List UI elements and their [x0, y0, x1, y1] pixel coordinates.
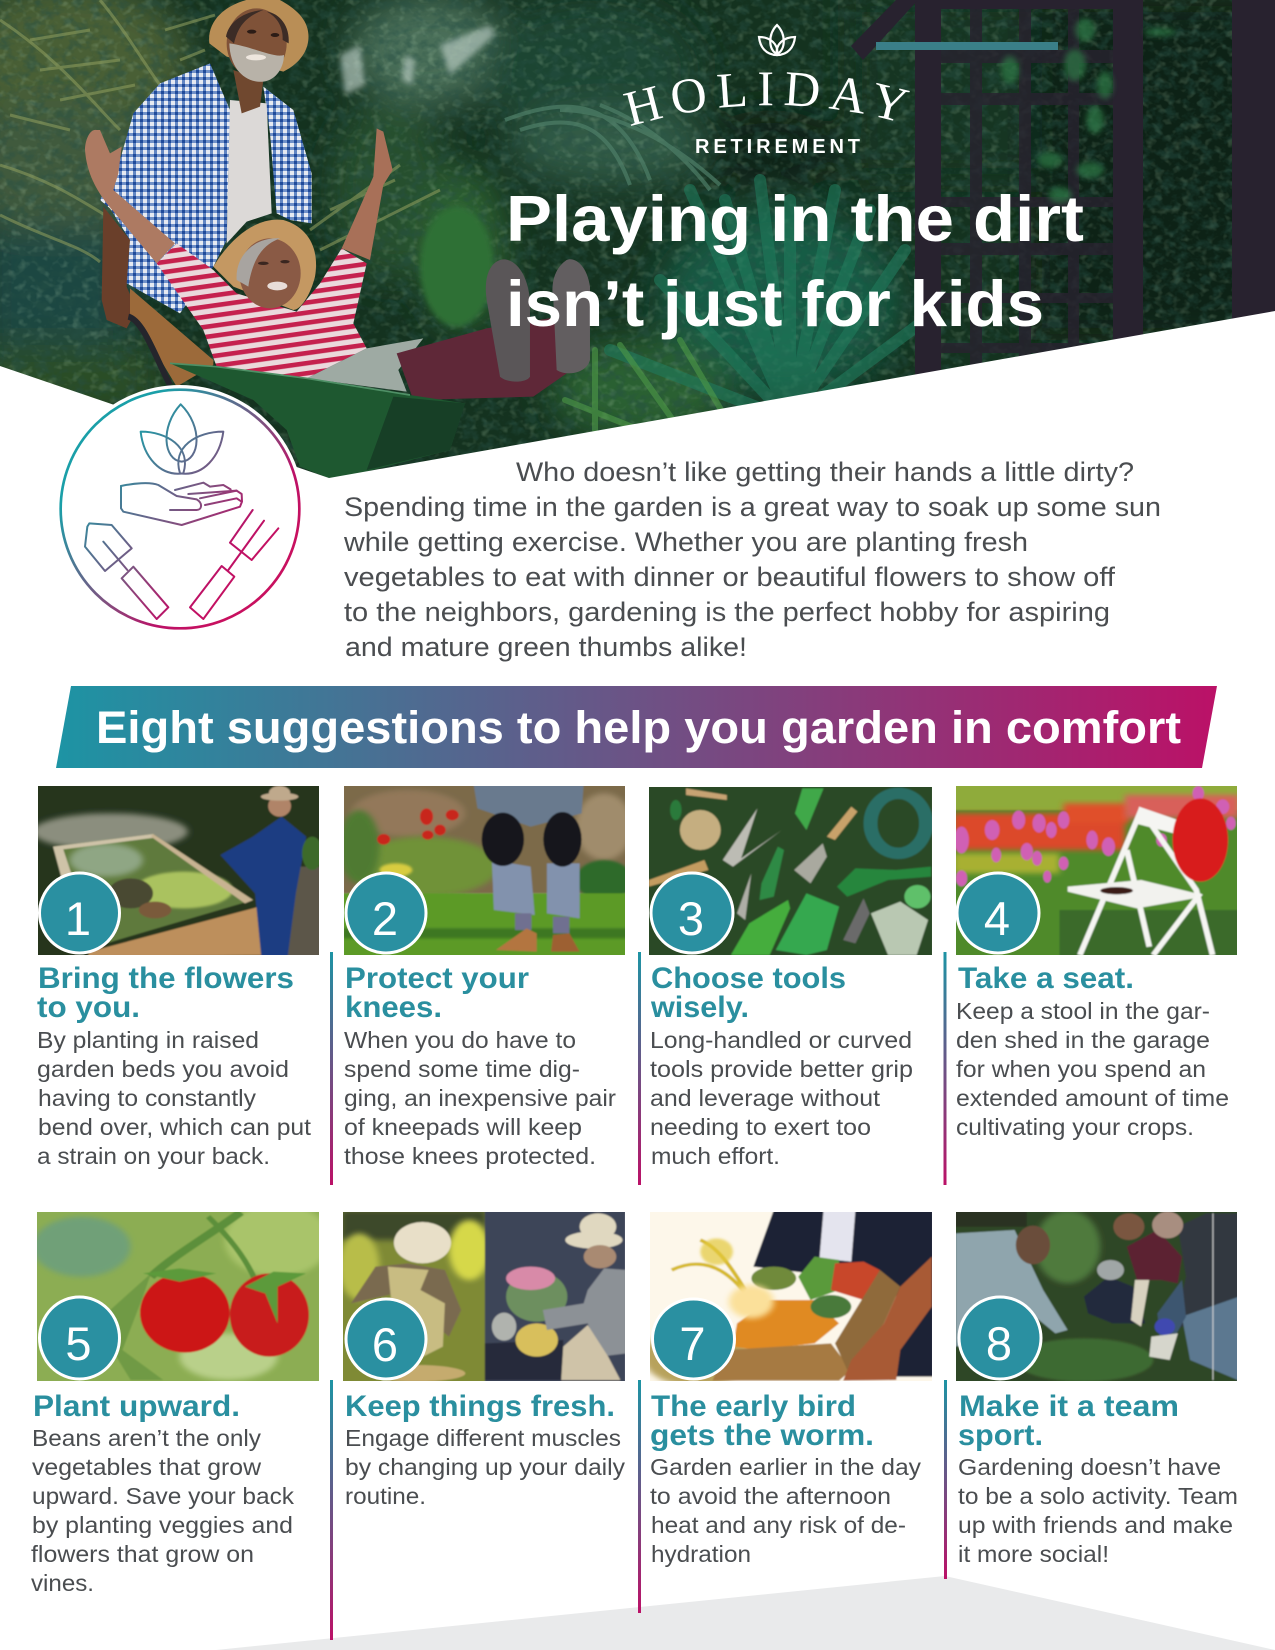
number badge: 5 — [65, 1317, 92, 1370]
card 1 — [33, 783, 322, 1169]
spiky leaves — [610, 180, 925, 420]
body: to be a solo activity. Team — [958, 1483, 1238, 1509]
section banner: Eight suggestions to help you garden in comfort — [96, 702, 1181, 753]
vertical dividers — [330, 952, 947, 1640]
body: Engage different muscles — [345, 1425, 621, 1451]
heading — [37, 962, 294, 1024]
body: Long-handled or curved — [650, 1027, 912, 1053]
photo: team gardening — [953, 1210, 1239, 1383]
card 2 — [339, 783, 633, 1169]
people, drawn in 3x coordinates — [85, 0, 590, 480]
photo: tomatoes — [37, 1212, 319, 1381]
card 5 — [31, 1203, 331, 1596]
heading: Make it a team — [959, 1390, 1179, 1423]
wheelbarrow — [170, 363, 465, 480]
man — [100, 0, 312, 387]
card 7 — [643, 1210, 933, 1567]
hero photo: couple gardening with wheelbarrow — [0, 0, 1275, 480]
body: routine. — [345, 1483, 426, 1509]
body: those knees protected. — [344, 1143, 596, 1169]
heading: to you. — [37, 991, 140, 1024]
number badge — [652, 1299, 734, 1379]
body — [650, 1454, 921, 1567]
brand logo: RETIREMENT — [695, 136, 860, 158]
heading: Keep things fresh. — [345, 1390, 615, 1423]
photo: two women gardening — [339, 1210, 627, 1383]
body: to avoid the afternoon — [650, 1483, 891, 1509]
number badge — [346, 1299, 426, 1379]
heading: gets the worm. — [650, 1419, 874, 1452]
body — [37, 1027, 311, 1169]
number badge — [346, 873, 426, 953]
intro paragraph: Spending time in the garden is a great way to soak up some sun — [344, 492, 1161, 522]
photo: chair among tulips — [953, 783, 1239, 957]
intro paragraph: vegetables to eat with dinner or beautiful flowers to show off — [344, 562, 1116, 592]
heading — [345, 962, 529, 1024]
number badge: 4 — [984, 892, 1010, 945]
body — [344, 1027, 616, 1169]
heading: Plant upward. — [33, 1390, 240, 1423]
body: much effort. — [651, 1143, 780, 1169]
circular gardening icon — [56, 385, 304, 633]
body — [956, 998, 1229, 1140]
body: it more social! — [958, 1541, 1109, 1567]
body: cultivating your crops. — [956, 1114, 1194, 1140]
body: Keep a stool in the gar- — [956, 998, 1210, 1024]
title: Playing in the dirt — [506, 182, 1084, 255]
body: hydration — [651, 1541, 751, 1567]
body — [31, 1425, 294, 1596]
intro paragraph: Who doesn’t like getting their hands a little dirty? — [516, 457, 1134, 487]
body: for when you spend an — [956, 1056, 1206, 1082]
heading: knees. — [345, 991, 442, 1024]
photo: man watering raised bed — [33, 783, 322, 957]
number badge: 7 — [679, 1317, 706, 1370]
wordmark: HOLIDAY — [622, 72, 910, 126]
title: isn’t just for kids — [506, 267, 1044, 340]
shrub beside the couple — [420, 207, 493, 327]
intro paragraph: to the neighbors, gardening is the perfect hobby for aspiring — [344, 597, 1110, 627]
brand logo — [622, 24, 910, 158]
body: garden beds you avoid — [37, 1056, 289, 1082]
heading: The early bird — [651, 1390, 856, 1423]
number badge — [651, 873, 733, 953]
body: tools provide better grip — [650, 1056, 913, 1082]
pale sky gaps — [340, 25, 495, 95]
intro paragraph: and mature green thumbs alike! — [345, 632, 747, 662]
body: up with friends and make — [958, 1512, 1233, 1538]
body: Gardening doesn’t have — [958, 1454, 1221, 1480]
number badge: 3 — [678, 892, 704, 945]
body — [650, 1027, 913, 1169]
heading — [958, 1390, 1179, 1452]
number badge — [957, 873, 1039, 953]
body: spend some time dig- — [344, 1056, 580, 1082]
body: upward. Save your back — [32, 1483, 294, 1509]
number badge — [40, 1297, 120, 1379]
body: By planting in raised — [37, 1027, 259, 1053]
photo: garden tools — [647, 785, 933, 957]
body: and leverage without — [650, 1085, 880, 1111]
heading: Protect your — [345, 962, 529, 995]
white diagonal section — [0, 311, 1275, 640]
intro paragraph — [343, 457, 1161, 662]
heading — [650, 962, 846, 1024]
woman — [85, 128, 590, 400]
body: vines. — [31, 1570, 94, 1596]
palm fronds — [0, 0, 440, 262]
title — [506, 182, 1084, 340]
decorative grey footer shape — [216, 1576, 1275, 1650]
body: by changing up your daily — [345, 1454, 625, 1480]
body: extended amount of time — [956, 1085, 1229, 1111]
card 6 — [339, 1210, 627, 1509]
number badge — [40, 873, 120, 953]
body: Beans aren’t the only — [32, 1425, 261, 1451]
heading: Take a seat. — [958, 962, 1134, 995]
number badge: 6 — [372, 1318, 398, 1371]
intro paragraph: while getting exercise. Whether you are planting fresh — [343, 527, 1028, 557]
card 3 — [647, 785, 933, 1169]
barrow handle — [128, 317, 170, 385]
number badge: 1 — [65, 892, 91, 945]
body: When you do have to — [344, 1027, 576, 1053]
body: den shed in the garage — [956, 1027, 1210, 1053]
body: needing to exert too — [650, 1114, 871, 1140]
section banner — [56, 686, 1217, 768]
body: flowers that grow on — [31, 1541, 254, 1567]
card 8 — [953, 1210, 1239, 1567]
palm in centre — [505, 105, 720, 190]
body — [345, 1425, 625, 1509]
number badge: 2 — [372, 892, 398, 945]
logo mark — [759, 25, 795, 55]
number badge: 8 — [986, 1317, 1012, 1370]
heading: sport. — [958, 1419, 1043, 1452]
foliage texture — [0, 0, 1275, 480]
heading: Choose tools — [651, 962, 846, 995]
body: Garden earlier in the day — [650, 1454, 921, 1480]
number badge — [959, 1297, 1041, 1379]
garden trellis — [851, 0, 1275, 380]
body: of kneepads will keep — [344, 1114, 582, 1140]
body: ging, an inexpensive pair — [344, 1085, 616, 1111]
body: vegetables that grow — [32, 1454, 262, 1480]
heading — [650, 1390, 874, 1452]
body: bend over, which can put — [38, 1114, 311, 1140]
heading: wisely. — [650, 991, 749, 1024]
body: heat and any risk of de- — [651, 1512, 906, 1538]
card 4 — [953, 783, 1239, 1140]
body: a strain on your back. — [37, 1143, 270, 1169]
photo: kneepads — [339, 783, 633, 957]
body — [958, 1454, 1238, 1567]
heading: Bring the flowers — [38, 962, 294, 995]
photo: crate of vegetables — [643, 1210, 933, 1387]
body: by planting veggies and — [32, 1512, 293, 1538]
body: having to constantly — [38, 1085, 256, 1111]
